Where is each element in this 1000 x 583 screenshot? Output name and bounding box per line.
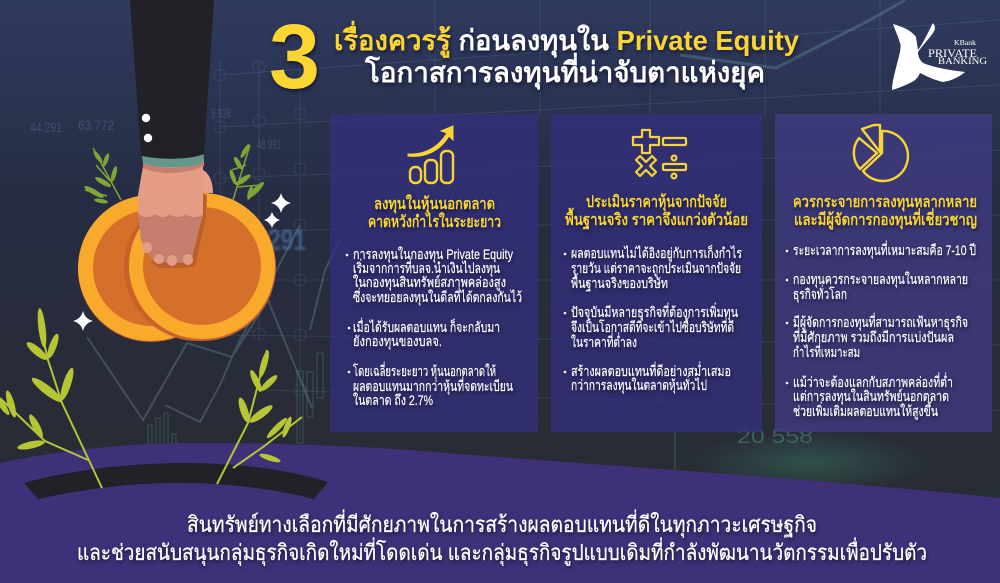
large plants [0, 308, 302, 488]
title number 3: 3 [269, 6, 320, 108]
panel body text: ช่วยเพิ่มเติมผลตอบแทนให้สูงขึ้น [793, 401, 938, 420]
panel body text: ผลตอบแทนมากกว่าหุ้นที่จดทะเบียน [353, 377, 513, 395]
panel body text: พื้นฐานจริงของบริษัท [571, 273, 668, 292]
panel heading: ประเมินราคาหุ้นจากปัจจัย [586, 193, 727, 212]
panel body text: สร้างผลตอบแทนที่ดีอย่างสม่ำเสมอ [571, 362, 731, 379]
panel body text: โดยเฉลี่ยระยะยาว หุ้นนอกตลาดให้ [353, 362, 496, 380]
cuff buttons [142, 114, 152, 142]
panel body text: ในตลาด ถึง 2.7% [353, 392, 433, 408]
panel body text: ในกองทุนสินทรัพย์สภาพคล่องสูง [353, 274, 506, 291]
logo: KBank Private Banking [892, 23, 988, 90]
logo text [928, 39, 988, 66]
panel body text: การลงทุนในกองทุน Private Equity [353, 246, 513, 263]
footer statement: สินทรัพย์ทางเลือกที่มีศักยภาพในการสร้างผลตอบแทนที่ดีในทุกภาวะเศรษฐกิจ [187, 509, 817, 538]
icon: rising bars with arrow [408, 126, 453, 183]
panel body text: ยังกองทุนของบลจ. [353, 333, 442, 350]
right coin [124, 193, 276, 341]
panel body text: กำไรที่เหมาะสม [793, 343, 860, 360]
coins [78, 193, 276, 342]
panel body text: เริ่มจากการที่บลจ.นำเงินไปลงทุน [353, 259, 500, 277]
panel body text: ปัจจุบันมีหลายธุรกิจที่ต้องการเพิ่มทุน [571, 303, 738, 321]
logo text: PRIVATE [928, 48, 977, 60]
panel body text: ในราคาที่ต่ำลง [571, 333, 637, 350]
panel body text: รายวัน แต่ราคาจะถูกประเมินจากปัจจัย [571, 260, 741, 277]
sparkles [73, 193, 291, 331]
panel heading [368, 194, 501, 231]
panel body text: ผลตอบแทนไม่ได้อิงอยู่กับการเก็งกำไร [571, 244, 742, 262]
panel body text: แต่การลงทุนในสินทรัพย์นอกตลาด [793, 388, 949, 405]
panel body text: แม้ว่าจะต้องแลกกับสภาพคล่องที่ต่ำ [793, 373, 953, 390]
background: 48.991 [257, 136, 281, 152]
panel heading: พื้นฐานจริง ราคาจึงแกว่งตัวน้อย [565, 207, 748, 230]
title: โอกาสการลงทุนที่น่าจับตาแห่งยุค [364, 52, 765, 90]
background: 291 [268, 224, 306, 257]
panel body text: ที่มีศักยภาพ รวมถึงมีการแบ่งปันผล [793, 328, 954, 345]
icon: pie chart [854, 125, 908, 181]
panel heading: ลงทุนในหุ้นนอกตลาด [374, 194, 495, 214]
panel body text [346, 246, 522, 408]
icon: math symbols [633, 130, 686, 178]
background: 44.291 [30, 119, 62, 135]
background: 63.772 [78, 117, 114, 133]
panel heading: คาดหวังกำไรในระยะยาว [368, 212, 501, 231]
panel body text: กว่าการลงทุนในตลาดหุ้นทั่วไป [571, 376, 707, 394]
background: 20 558 [737, 426, 813, 448]
panel: invest in private equity [330, 114, 538, 432]
panel: valuation [551, 114, 762, 432]
small upper plants [83, 143, 266, 204]
sleeve [130, 0, 214, 173]
panel body text: เมื่อได้รับผลตอบแทน ก็จะกลับมา [353, 318, 500, 335]
ground with hole [0, 443, 1000, 583]
title [334, 20, 799, 90]
background: 9.928 [211, 105, 231, 121]
logo text: BANKING [938, 56, 988, 66]
panel body text: ซึ่งจะทยอยลงทุนในดีลที่ได้ตกลงกันไว้ [353, 288, 522, 306]
panel body text: ธุรกิจทั่วโลก [793, 285, 847, 303]
footer statement [77, 509, 927, 566]
panel body text [564, 244, 742, 394]
panel: diversification [775, 114, 992, 432]
panel heading [565, 193, 748, 230]
panel body text [786, 241, 976, 420]
panel body text: จึงเป็นโอกาสดีที่จะเข้าไปซื้อบริษัทที่ดี [571, 317, 734, 335]
logo text: KBank [954, 39, 977, 47]
title: เรื่องควรรู้ ก่อนลงทุนใน Private Equity [334, 20, 799, 58]
panel heading [793, 194, 977, 231]
left coin [78, 195, 224, 342]
hand [138, 166, 213, 268]
logo K mark [892, 23, 965, 90]
